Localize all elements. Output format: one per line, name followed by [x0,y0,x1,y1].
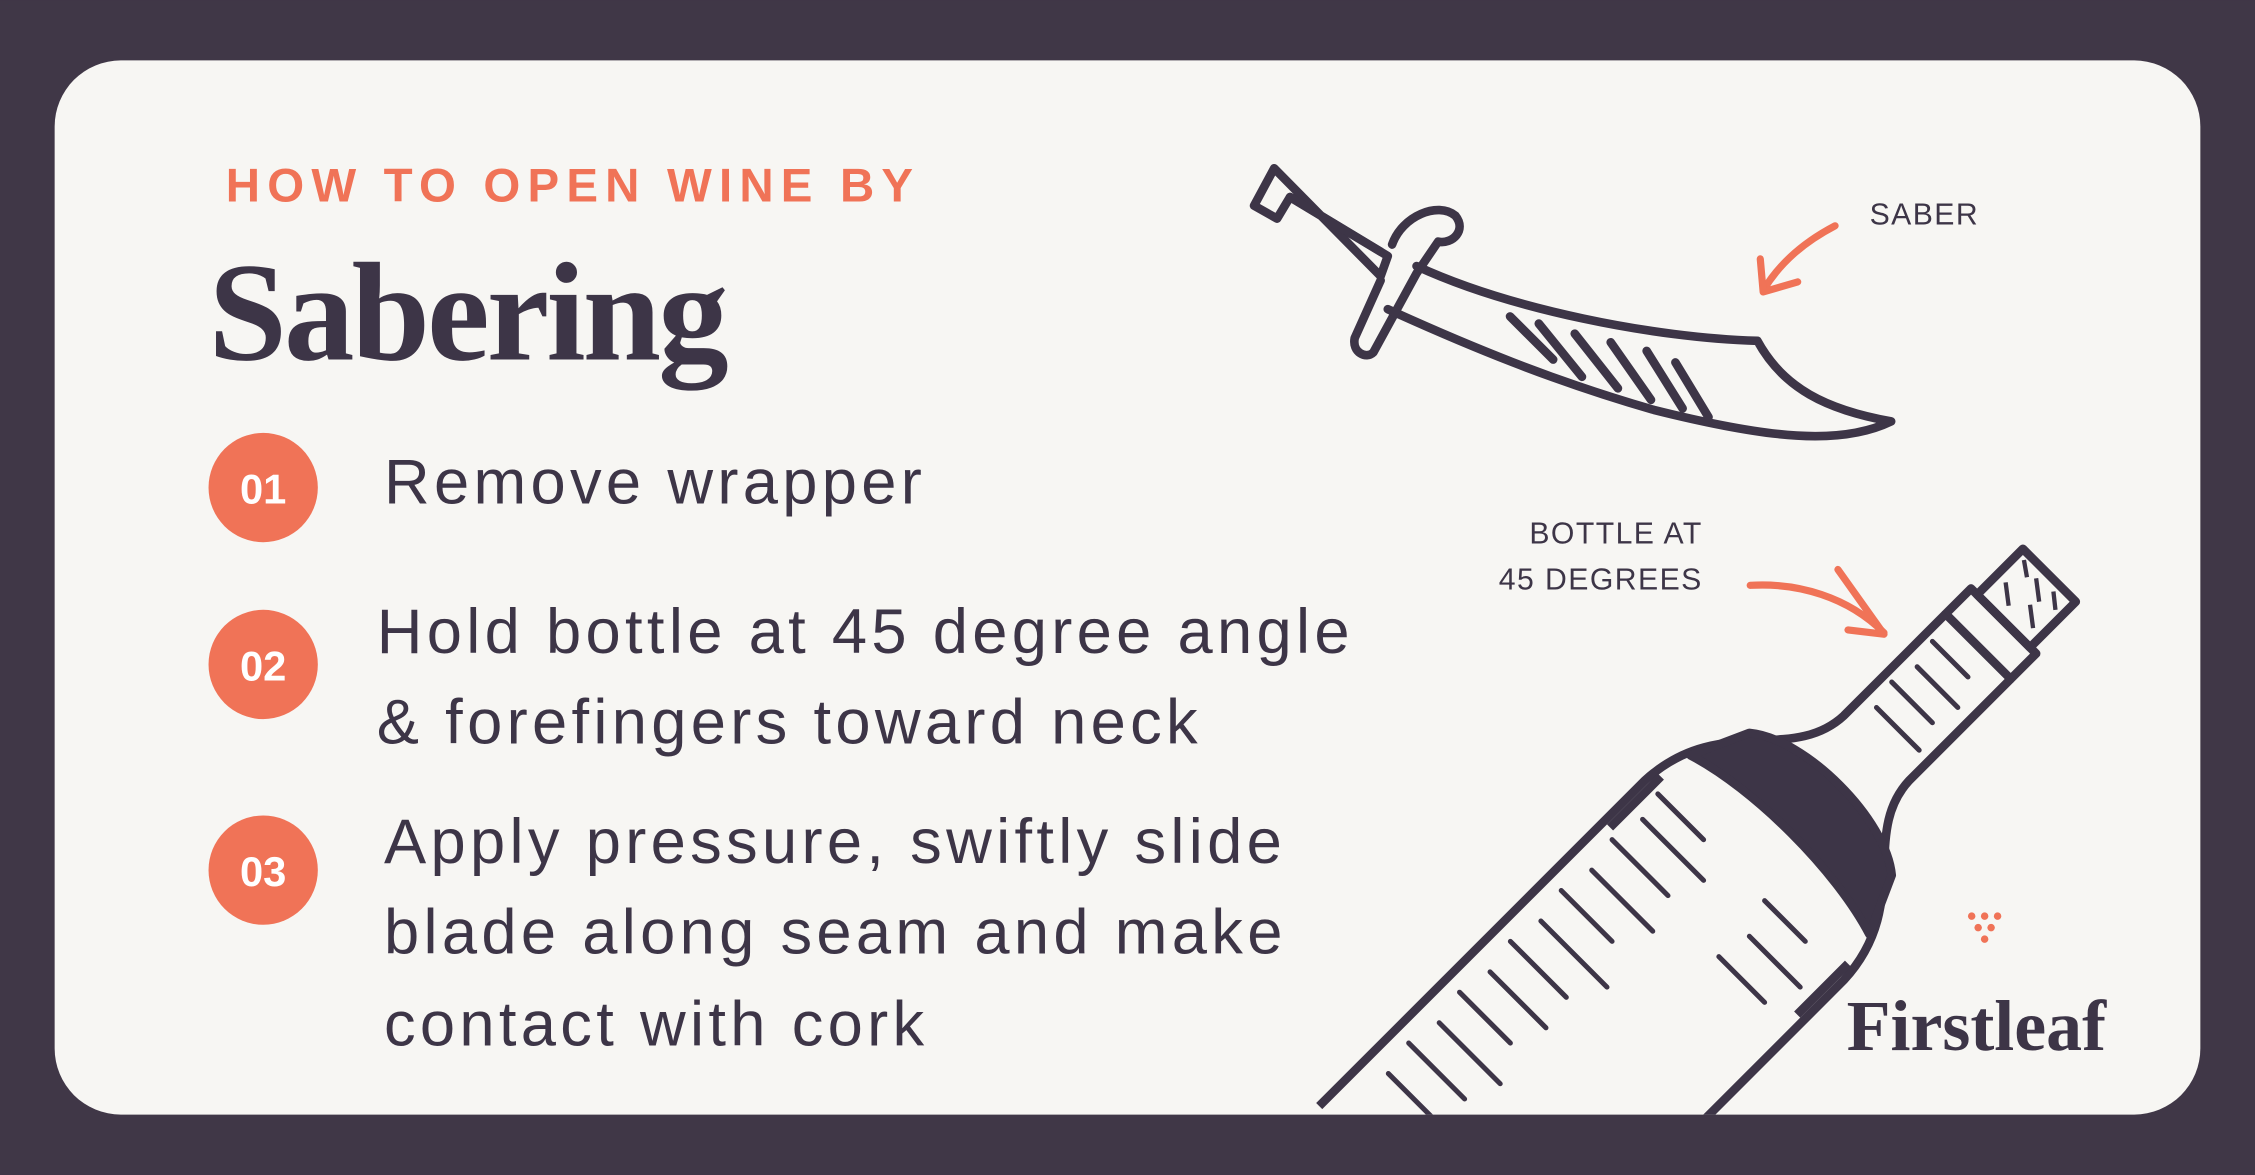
step 03: contact with cork [384,990,928,1060]
logo: Firstleaf: Firstleaf [1847,986,2107,1066]
icon: saber [1254,168,1891,436]
label: saber: SABER [1870,198,1979,231]
label: bottle at 45 degrees [1499,518,1703,597]
step 02 [209,597,1354,758]
step 02: & forefingers toward neck [377,688,1202,758]
step 01: 01 [240,465,286,512]
label: bottle at 45 degrees: BOTTLE AT [1529,518,1703,551]
step 03: blade along seam and make [384,898,1287,968]
step 01 [209,433,926,542]
arrow: to bottle [1750,570,1884,634]
step 03: 03 [240,848,286,895]
heading: Sabering: Sabering [209,235,728,391]
step 02: Hold bottle at 45 degree angle [377,597,1354,667]
step 03: Apply pressure, swiftly slide [384,807,1286,877]
step 03 [209,807,1287,1060]
step 02: 02 [240,642,286,689]
arrow: to saber [1760,226,1835,292]
step 01: Remove wrapper [384,447,926,517]
title: how to open wine by: HOW TO OPEN WINE BY [226,159,920,212]
icon: bottle [1316,544,2080,1115]
label: bottle at 45 degrees: 45 DEGREES [1499,564,1703,597]
logo: grapes [1968,912,2001,943]
